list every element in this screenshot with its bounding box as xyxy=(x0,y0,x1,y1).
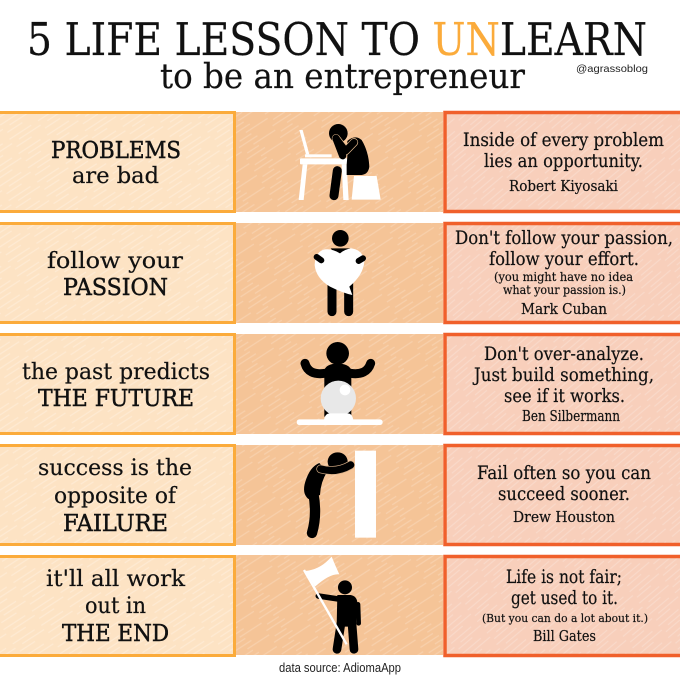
panel: row 2 quote: Mark Cuban xyxy=(521,302,607,318)
panel: row 1 illustration xyxy=(236,112,443,212)
icon: person with crystal ball xyxy=(297,342,383,425)
panel: row 2 lesson: PASSION xyxy=(63,275,168,301)
handle: @agrassoblog xyxy=(576,63,648,75)
panel: row 1 quote: lies an opportunity. xyxy=(484,150,643,172)
panel: row 2 lesson: follow your xyxy=(47,249,184,274)
panel: row 5 quote: (But you can do a lot about it.) xyxy=(482,611,648,625)
panel: row 4 lesson: FAILURE xyxy=(63,511,168,537)
title xyxy=(27,13,647,97)
icon: person leaning head against wall xyxy=(304,451,376,538)
panel: row 2 illustration xyxy=(236,223,443,323)
panel: row 4 lesson: opposite of xyxy=(54,484,178,509)
panel: row 5 lesson: out in xyxy=(85,594,146,619)
panel: row 3 illustration xyxy=(236,334,443,434)
panel: row 4 quote xyxy=(445,446,680,544)
panel: row 1 lesson xyxy=(0,112,234,212)
icon: person head in hands at laptop xyxy=(299,124,381,200)
panel: row 4 quote: Drew Houston xyxy=(513,510,615,526)
panel: row 2 quote: what your passion is.) xyxy=(503,283,626,297)
panel: row 5 lesson xyxy=(0,556,234,656)
icon: person holding heart xyxy=(315,230,364,312)
panel: row 3 quote: Just build something, xyxy=(472,364,654,386)
title: 5 LIFE LESSON TO UNLEARN xyxy=(27,13,647,66)
panel: row 3 quote: Ben Silbermann xyxy=(522,409,620,425)
panel: row 3 lesson: the past predicts xyxy=(22,360,210,385)
panel: row 4 lesson: success is the xyxy=(38,456,192,481)
panel: row 5 lesson: it'll all work xyxy=(46,567,186,592)
panel: row 5 quote: Bill Gates xyxy=(533,629,596,645)
panel: row 3 lesson: THE FUTURE xyxy=(38,386,194,412)
panel: row 5 lesson: THE END xyxy=(62,621,169,647)
panel: row 1 lesson: PROBLEMS xyxy=(51,138,181,164)
panel: row 2 lesson xyxy=(0,224,234,322)
panel: row 4 illustration xyxy=(236,445,443,545)
panel: row 4 quote: Fail often so you can xyxy=(477,462,651,484)
panel: row 4 quote: succeed sooner. xyxy=(498,483,630,505)
title: to be an entrepreneur xyxy=(160,57,525,97)
panel: row 2 quote: follow your effort. xyxy=(489,248,639,270)
panel: row 1 quote xyxy=(445,112,680,212)
panel: row 2 quote xyxy=(445,224,680,322)
panel: row 1 lesson: are bad xyxy=(72,164,159,189)
panel: row 5 quote: Life is not fair; xyxy=(506,566,622,588)
icon: person holding white flag xyxy=(304,557,359,649)
panel: row 3 quote xyxy=(445,334,680,434)
panel: row 1 quote: Robert Kiyosaki xyxy=(509,179,618,195)
panel: row 3 quote: see if it works. xyxy=(504,385,625,407)
panel: row 3 lesson xyxy=(0,334,234,434)
panel: row 5 illustration xyxy=(236,555,443,655)
panel: row 3 quote: Don't over-analyze. xyxy=(484,343,644,365)
panel: row 4 lesson xyxy=(0,446,234,544)
data source note: data source: AdiomaApp xyxy=(279,661,401,675)
panel: row 2 quote: (you might have no idea xyxy=(494,270,633,284)
panel: row 5 quote xyxy=(445,556,680,656)
panel: row 5 quote: get used to it. xyxy=(511,587,618,609)
